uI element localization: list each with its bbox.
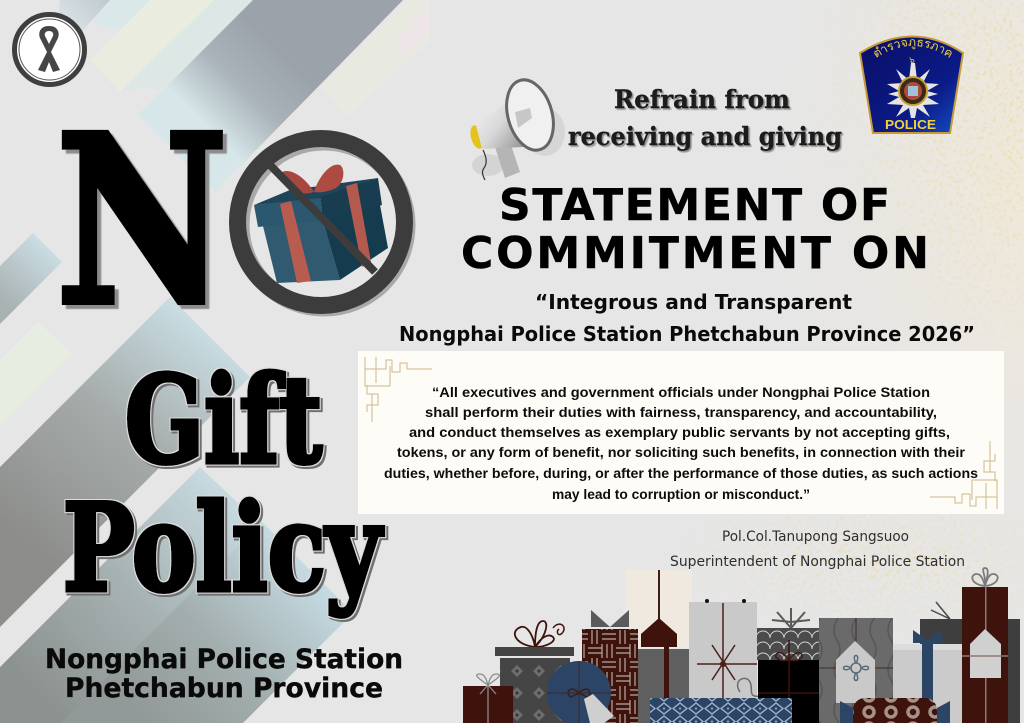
heading: statement of commitment: COMMITMENT ON: [461, 228, 929, 279]
body text: duties, whether before, during, or after the performance of those duties, as such actions: [384, 466, 978, 481]
diagonal bands: lower left: [0, 233, 353, 723]
small brown gift: [463, 674, 513, 723]
panel: statement text: [358, 351, 1004, 514]
tall dark gift: [920, 602, 1020, 723]
brown tall gift: [962, 568, 1008, 723]
title: Policy: Policy: [63, 478, 384, 619]
logo: police badge: [858, 36, 964, 134]
body text: [384, 385, 978, 502]
heading: statement of commitment: STATEMENT OF: [499, 180, 890, 231]
station name: Phetchabun Province: [65, 673, 383, 704]
signature: Superintendent of Nongphai Police Station: [670, 554, 965, 570]
heading: refrain from receiving and giving: [568, 85, 842, 151]
heading: refrain from receiving and giving: receiving and giving: [568, 122, 842, 151]
cream gift: [625, 570, 692, 648]
station name: [45, 644, 403, 704]
heading: statement of commitment: [461, 180, 929, 279]
gift box: [254, 165, 388, 283]
brick gift: [582, 610, 638, 723]
body text: tokens, or any form of benefit, nor soliciting such benefits, in connection with their: [397, 445, 966, 460]
wavy gift: [819, 618, 893, 723]
title: N: N: [56, 84, 228, 357]
background: [697, 0, 1024, 626]
signature: [670, 529, 965, 570]
ornament: bottom-right corner: [930, 441, 997, 509]
subheading: integrous and transparent: Nongphai Police Station Phetchabun Province 2026”: [399, 322, 975, 346]
icon: prohibited gift: [238, 138, 407, 308]
pale ribbon gift: [893, 630, 964, 723]
illustration: gift boxes: [463, 568, 1020, 723]
grey gift: [638, 640, 697, 723]
blue diamond gift: [650, 698, 792, 723]
scallop gift: [757, 608, 820, 660]
title: Gift: Gift: [125, 350, 322, 491]
hex gift: [495, 621, 574, 723]
diagonal bands: top: [58, 0, 430, 192]
blue round gift: [547, 661, 614, 723]
body text: “All executives and government officials under Nongphai Police Station: [432, 385, 930, 400]
black gift: [758, 640, 828, 723]
icon: megaphone: [468, 74, 565, 180]
subheading: integrous and transparent: [399, 290, 975, 346]
icon: mourning ribbon badge: [14, 14, 84, 84]
station name: Nongphai Police Station: [45, 644, 403, 675]
candy gift: [840, 698, 950, 723]
logo: police badge: ๖: [909, 55, 915, 65]
heading: refrain from receiving and giving: Refrain from: [614, 85, 790, 114]
body text: shall perform their duties with fairness, transparency, and accountability,: [425, 405, 937, 420]
logo: police badge: ตำรวจภูธรภาค: [874, 39, 952, 58]
logo: police badge: POLICE: [885, 117, 936, 132]
subheading: integrous and transparent: “Integrous and Transparent: [535, 290, 852, 314]
signature: Pol.Col.Tanupong Sangsuoo: [722, 529, 909, 545]
body text: and conduct themselves as exemplary public servants by not accepting gifts,: [409, 425, 950, 440]
ornament: top-left corner: [365, 357, 432, 422]
light grey gift: [689, 599, 779, 723]
body text: may lead to corruption or misconduct.”: [552, 487, 810, 502]
